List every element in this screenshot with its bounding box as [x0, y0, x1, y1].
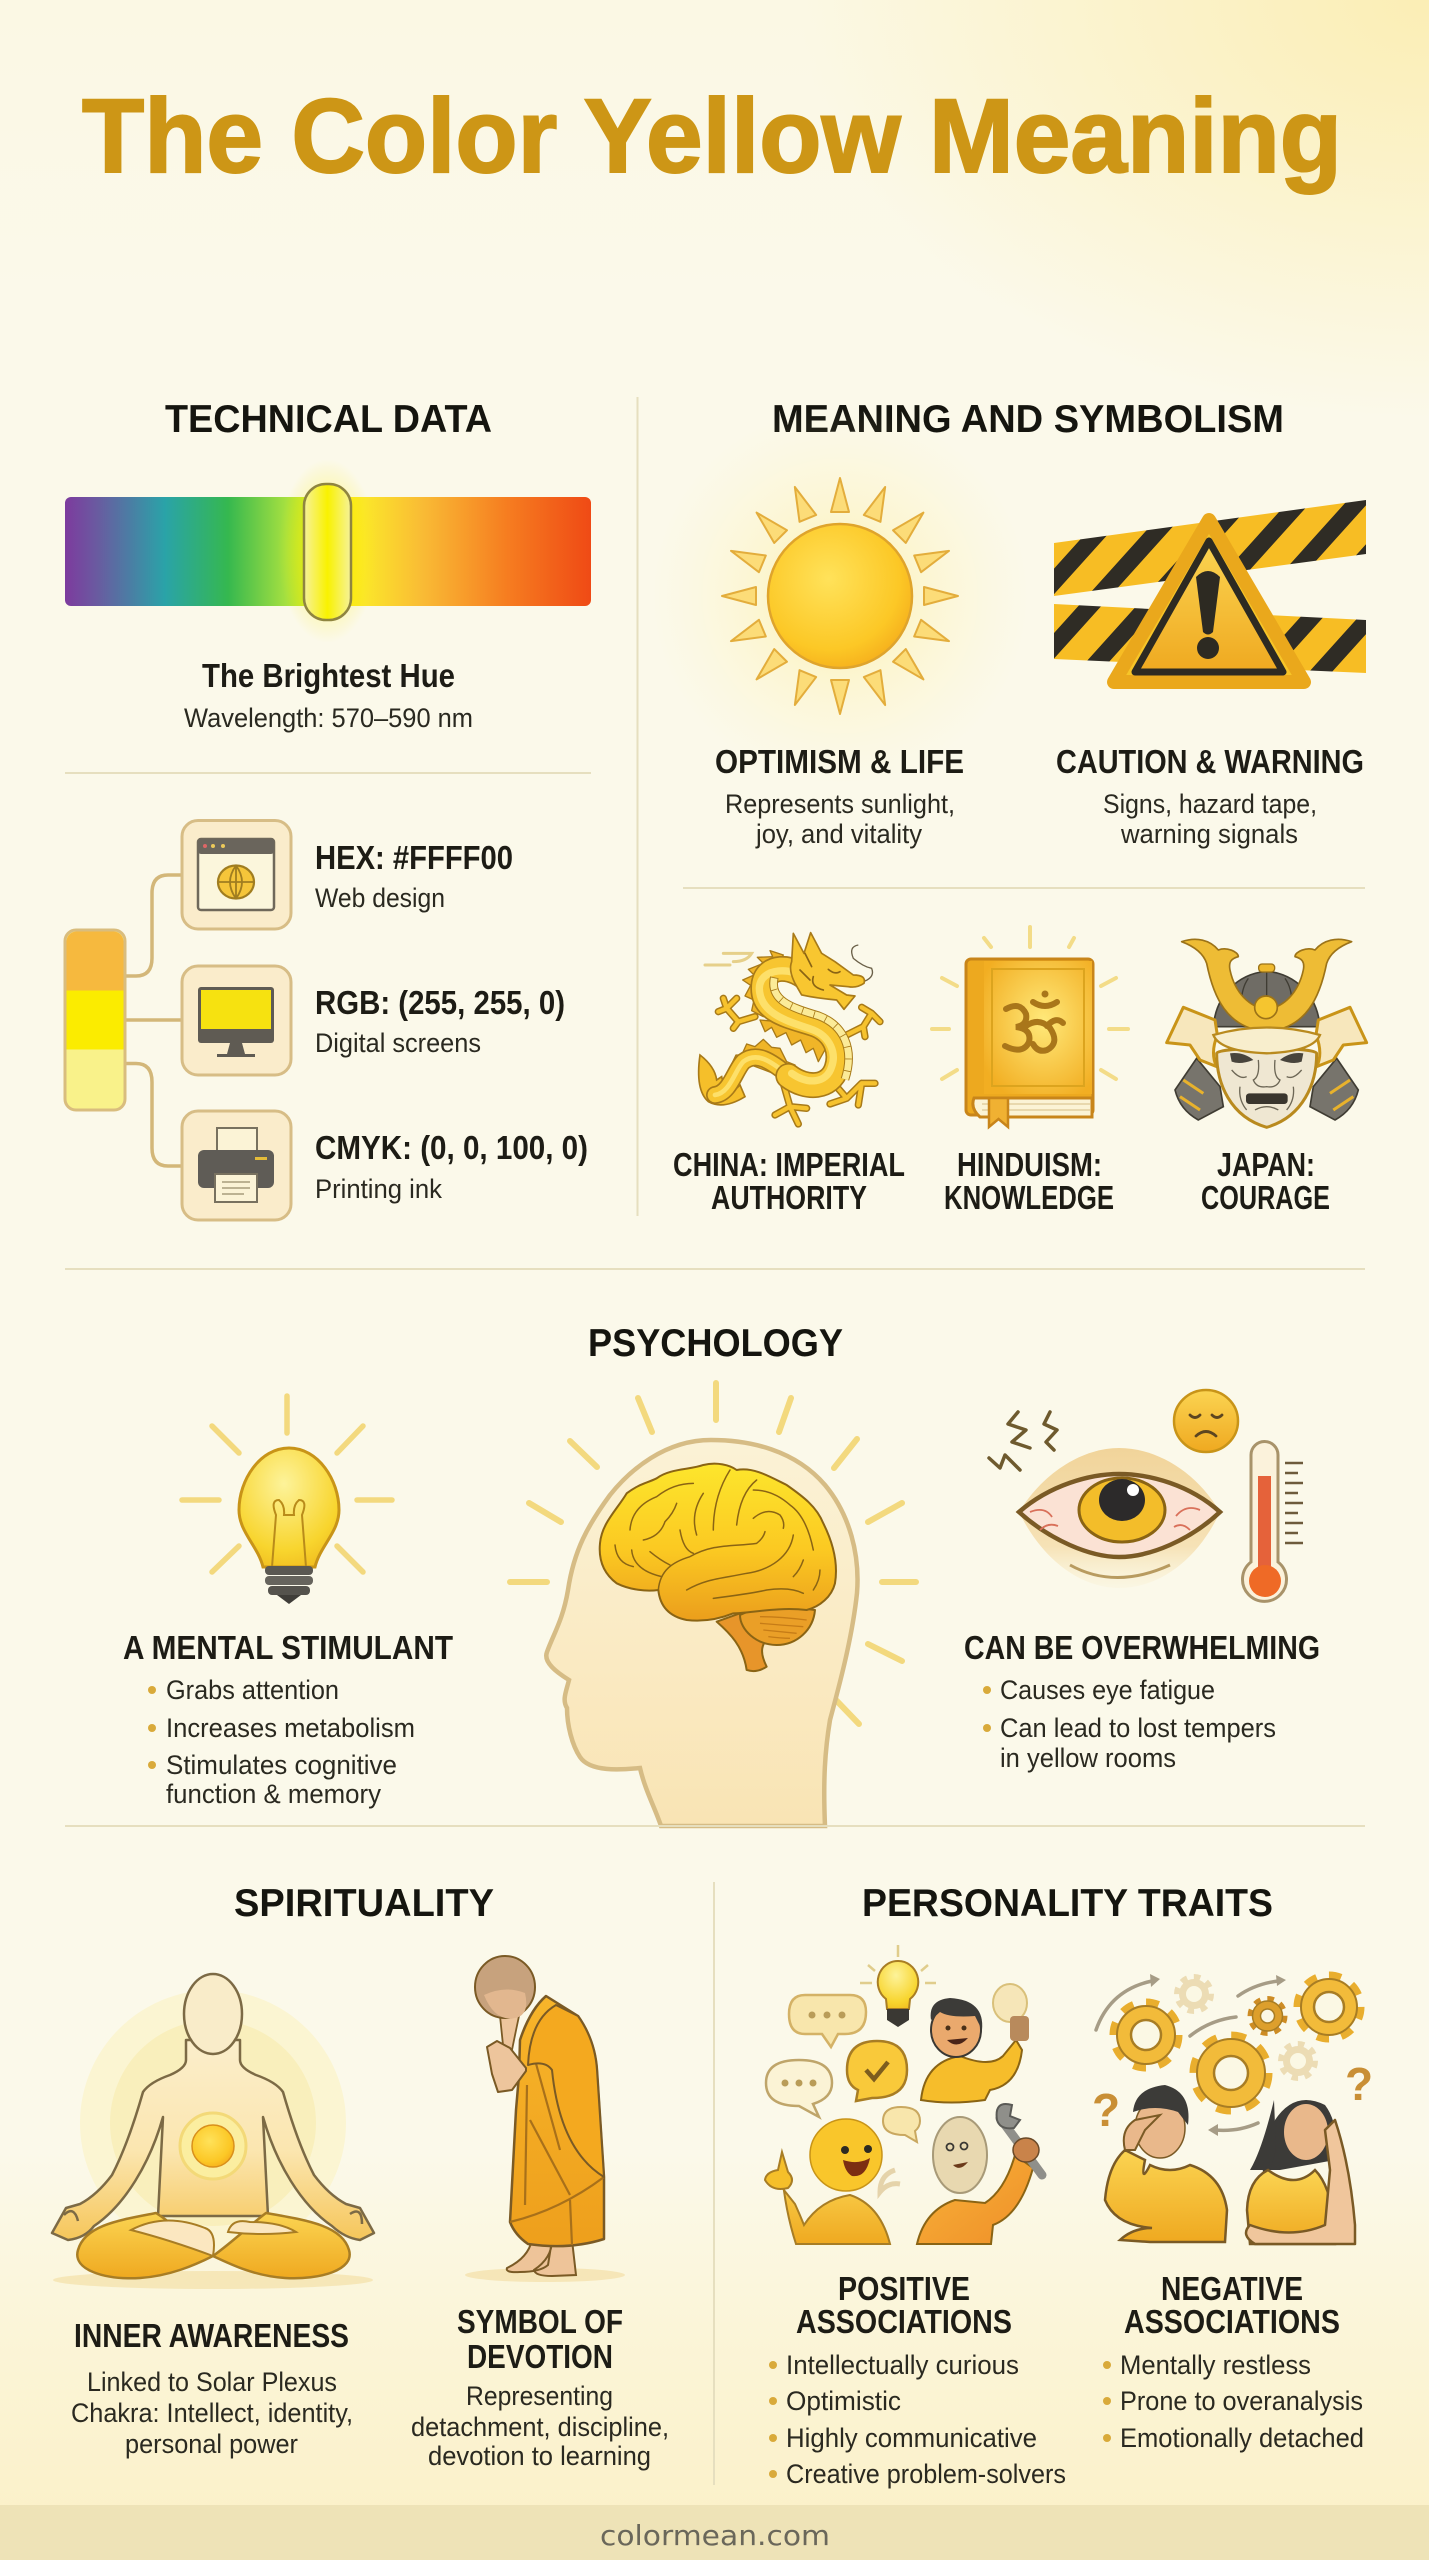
footer: colormean.com: [600, 2519, 830, 2552]
text: positive associations: POSITIVE: [838, 2270, 970, 2307]
heading: spirituality: SPIRITUALITY: [234, 1882, 494, 1925]
text: caution and warning: CAUTION & WARNING: [1056, 743, 1364, 780]
illustration: negative associations people and gears: ?: [1345, 2058, 1373, 2110]
text: negative associations: Mentally restless: [1120, 2350, 1311, 2380]
smiling figure: [776, 2172, 890, 2244]
icon: printer: [182, 1111, 291, 1220]
panel: personality traits: [765, 1882, 1373, 2489]
text: rgb: RGB: (255, 255, 0): [315, 984, 565, 1021]
text: caution and warning: warning signals: [1120, 819, 1298, 849]
text: symbol of devotion: DEVOTION: [467, 2338, 613, 2375]
text: can be overwhelming: [964, 1629, 1320, 1773]
text: a mental stimulant: Stimulates cognitive: [166, 1750, 397, 1780]
icon: monitor: [182, 966, 291, 1075]
text: the brightest hue: The Brightest Hue: [202, 657, 455, 694]
icon: light bulb: [182, 1396, 392, 1604]
text: positive associations: Optimistic: [786, 2386, 901, 2416]
panel: technical data: [65, 398, 591, 1220]
text: symbol of devotion: [411, 2303, 669, 2471]
text: optimism and life: joy, and vitality: [755, 819, 922, 849]
color swatch with connectors: [65, 875, 182, 1166]
text: negative associations: Emotionally detached: [1120, 2423, 1364, 2453]
text: china: CHINA: IMPERIAL: [673, 1146, 905, 1183]
illustration: negative associations people and gears: [1092, 1974, 1373, 2244]
text: inner awareness: [71, 2317, 353, 2459]
text: digital screens: Digital screens: [315, 1028, 481, 1058]
text: inner awareness: INNER AWARENESS: [74, 2317, 349, 2354]
text: symbol of devotion: Representing: [466, 2381, 613, 2411]
brain illustration: [600, 1464, 836, 1671]
sad face: [1174, 1390, 1238, 1452]
text: caution and warning: Signs, hazard tape,: [1103, 789, 1317, 819]
gears: [1114, 1976, 1360, 2110]
text: a mental stimulant: Increases metabolism: [166, 1713, 415, 1743]
panel: spirituality: [52, 1882, 669, 2471]
text: wavelength: Wavelength: 570–590 nm: [184, 703, 473, 733]
question marks: ?: [1092, 2084, 1120, 2136]
text: printing ink: Printing ink: [315, 1174, 442, 1204]
text: negative associations: NEGATIVE: [1161, 2270, 1303, 2307]
waving man: [921, 2040, 1022, 2102]
heading: technical data: TECHNICAL DATA: [165, 398, 492, 441]
icon: web browser: [182, 820, 291, 929]
text: hinduism: HINDUISM:: [957, 1146, 1102, 1183]
text: can be overwhelming: CAN BE OVERWHELMING: [964, 1629, 1320, 1666]
text: china: AUTHORITY: [711, 1179, 867, 1216]
icon: head with brain: [510, 1383, 916, 1826]
woman holding head: [1263, 2100, 1336, 2177]
text: optimism and life: OPTIMISM & LIFE: [715, 743, 964, 780]
text: hinduism: KNOWLEDGE: [944, 1179, 1114, 1216]
man with wrench: [917, 2155, 1033, 2244]
text: optimism and life: [715, 743, 964, 849]
text: china: [673, 1146, 905, 1216]
text: negative associations: [1103, 2270, 1364, 2453]
icon: golden dragon: [699, 933, 880, 1124]
chart: visible spectrum with yellow marker: [65, 459, 591, 643]
panel: psychology: [123, 1322, 1320, 1826]
icon: samurai helmet: [1167, 939, 1367, 1127]
text: japan: COURAGE: [1201, 1179, 1330, 1216]
icon: bowing monk: [465, 1956, 625, 2282]
motion arrows: [1096, 1981, 1278, 2130]
text: optimism and life: Represents sunlight,: [725, 789, 955, 819]
zigzag strain lines: [989, 1412, 1057, 1470]
illustration: positive associations people: [765, 1945, 1042, 2244]
icon: hazard tape and warning sign: [1054, 500, 1366, 682]
heading: personality traits: PERSONALITY TRAITS: [862, 1882, 1273, 1925]
text: positive associations: Creative problem-solvers: [786, 2459, 1066, 2489]
text: a mental stimulant: Grabs attention: [166, 1675, 339, 1705]
text: hex: HEX: #FFFF00: [315, 839, 513, 876]
text: japan: [1201, 1146, 1330, 1216]
text: inner awareness: Linked to Solar Plexus: [87, 2367, 337, 2397]
text: web design: Web design: [315, 883, 445, 913]
text: positive associations: Highly communicative: [786, 2423, 1037, 2453]
heading: meaning and symbolism: MEANING AND SYMBOLISM: [772, 398, 1284, 441]
text: can be overwhelming: Causes eye fatigue: [1000, 1675, 1215, 1705]
idea bulb: [860, 1945, 936, 1983]
panel: meaning and symbolism: [650, 398, 1367, 1216]
icon: book with om symbol: [932, 927, 1128, 1127]
text: a mental stimulant: [123, 1629, 453, 1809]
text: positive associations: ASSOCIATIONS: [796, 2303, 1012, 2340]
speech bubbles: [789, 1995, 866, 2047]
text: cmyk: CMYK: (0, 0, 100, 0): [315, 1129, 588, 1166]
text: inner awareness: Chakra: Intellect, identity,: [71, 2398, 353, 2428]
text: positive associations: Intellectually curious: [786, 2350, 1019, 2380]
text: a mental stimulant: A MENTAL STIMULANT: [123, 1629, 453, 1666]
text: can be overwhelming: in yellow rooms: [1000, 1743, 1176, 1773]
text: positive associations: [769, 2270, 1066, 2489]
text: japan: JAPAN:: [1217, 1146, 1315, 1183]
heading: psychology: PSYCHOLOGY: [588, 1322, 843, 1365]
thermometer: [1243, 1442, 1287, 1601]
text: can be overwhelming: Can lead to lost tempers: [1000, 1713, 1276, 1743]
footer: [0, 2505, 1429, 2560]
text: caution and warning: [1056, 743, 1364, 849]
icon: sun: [650, 406, 1030, 786]
text: negative associations: ASSOCIATIONS: [1124, 2303, 1340, 2340]
man holding head: [1105, 2150, 1227, 2242]
icon: meditating figure with chakra: [52, 1974, 374, 2289]
text: hinduism: [944, 1146, 1114, 1216]
text: symbol of devotion: devotion to learning: [428, 2441, 651, 2471]
text: symbol of devotion: detachment, discipline,: [411, 2412, 669, 2442]
icon: tired eye, sad face and thermometer: [989, 1390, 1303, 1601]
text: inner awareness: personal power: [125, 2429, 298, 2459]
title: The Color Yellow Meaning: [82, 78, 1342, 195]
text: a mental stimulant: function & memory: [166, 1779, 381, 1809]
text: symbol of devotion: SYMBOL OF: [457, 2303, 623, 2340]
text: negative associations: Prone to overanalysis: [1120, 2386, 1363, 2416]
